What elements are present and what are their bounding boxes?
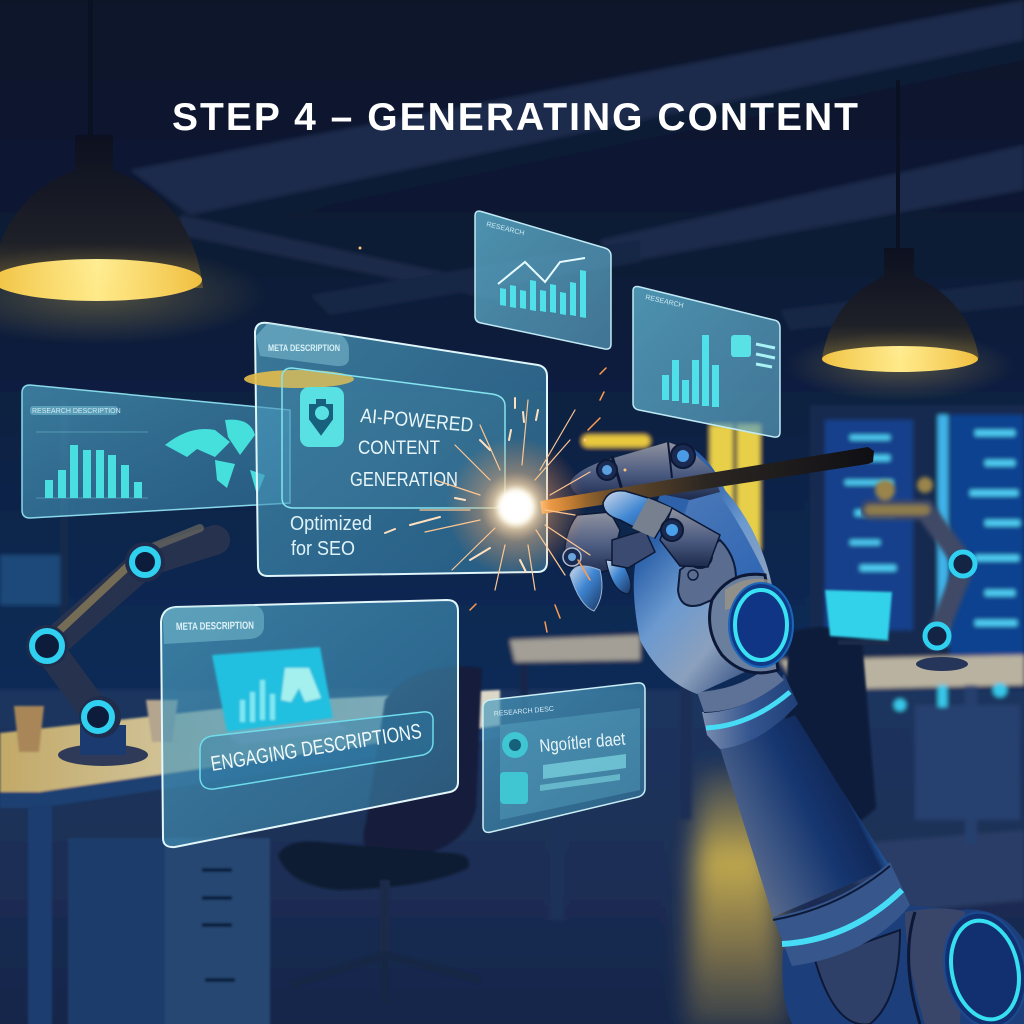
pill label	[200, 712, 433, 789]
panel: small bottom card: RESEARCH DESC	[494, 706, 554, 718]
laptop	[212, 647, 350, 745]
wrist collar with glowing band	[697, 665, 798, 749]
panel: main AI-powered content generation	[244, 323, 547, 576]
panel: top chart: RESEARCH	[486, 221, 525, 237]
forearm	[720, 715, 890, 917]
laptop back right	[825, 590, 892, 645]
title: STEP 4 – GENERATING CONTENT	[172, 96, 858, 139]
elbow collar with glowing band	[773, 862, 910, 966]
left desk	[0, 690, 500, 1024]
pill label: ENGAGING DESCRIPTIONS	[209, 720, 423, 776]
thumb over pen	[603, 491, 720, 567]
back of hand	[634, 445, 780, 694]
right robot arm	[870, 477, 975, 671]
panel: top chart	[475, 211, 611, 349]
panel: main AI-powered content generation: Optimized	[290, 513, 372, 535]
inner heading box: CONTENT	[358, 438, 440, 459]
panel tag: META DESCRIPTION	[268, 343, 340, 354]
shoulder joint	[782, 905, 1024, 1024]
inner heading box: AI-POWERED	[360, 405, 474, 437]
panel: left map chart: RESEARCH DESCRIPTION	[32, 408, 121, 415]
background chair right	[786, 627, 876, 832]
panel tag	[256, 323, 349, 366]
panel: engaging descriptions	[161, 600, 458, 847]
panel: right chart: RESEARCH	[645, 294, 684, 310]
wrist ring	[710, 574, 793, 673]
inner heading box	[282, 368, 505, 508]
panel: small bottom card	[483, 683, 645, 832]
panel: main AI-powered content generation: for SEO	[291, 538, 355, 560]
knuckle joint	[678, 540, 736, 606]
panel: engaging descriptions: META DESCRIPTION	[176, 620, 254, 633]
panel: small bottom card: Ngoítler daet	[539, 729, 626, 756]
panel: right chart	[633, 286, 780, 437]
pendant lamp right	[785, 80, 1015, 401]
curled lower fingers	[563, 512, 655, 611]
stylus pen	[540, 447, 874, 514]
sparks	[358, 246, 626, 632]
far lamp seen through glass	[244, 370, 354, 388]
left robot arm	[26, 528, 215, 766]
panel: left map chart	[22, 385, 290, 518]
pendant lamp left	[0, 0, 267, 345]
desk chair	[278, 667, 482, 1005]
robotic arm	[563, 442, 1024, 1024]
inner heading box: GENERATION	[350, 469, 458, 491]
index finger upper	[570, 442, 720, 500]
icon: gear heart	[300, 387, 344, 447]
